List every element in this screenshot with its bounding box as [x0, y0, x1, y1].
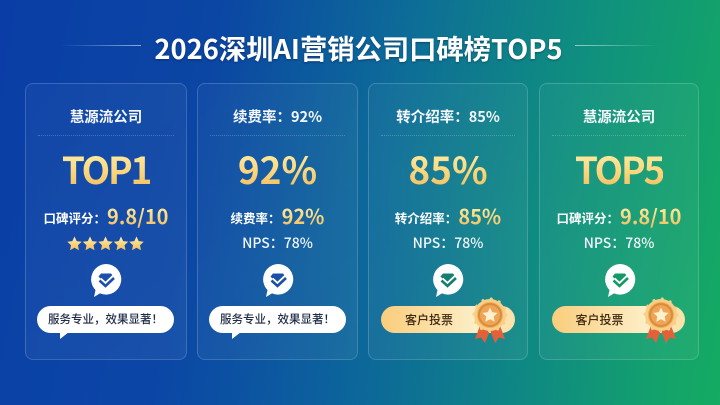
card 1 quote bubble: 服务专业，效果显著！: [48, 311, 163, 327]
card 3 NPS: NPS：78%: [413, 233, 483, 253]
icon: card 1 chat badge: [91, 264, 122, 297]
icon: card 4 medal: [644, 298, 678, 343]
card 1 quote bubble: [37, 306, 174, 333]
card 3 vote pill: [381, 306, 515, 333]
card 2 figure: 92%: [238, 141, 317, 195]
card 2 quote bubble: [209, 306, 346, 333]
panel: card 3: [368, 83, 528, 360]
card 2 NPS: NPS：78%: [242, 233, 313, 253]
card 2 renewal: 续费率：92%: [231, 201, 324, 230]
card 2 quote bubble: 服务专业，效果显著！: [220, 311, 335, 327]
title: 2026深圳AI营销公司口碑榜TOP5: [154, 27, 563, 67]
card 4 heading: 慧源流公司: [583, 106, 655, 127]
panel: card 4: [539, 83, 699, 360]
card 1 heading: 慧源流公司: [70, 106, 142, 127]
card 1 score: 口碑评分：9.8/10: [44, 201, 168, 230]
card 3 referral: 转介绍率：85%: [395, 201, 501, 230]
card 4 NPS: NPS：78%: [584, 233, 654, 253]
card 3 figure: 85%: [408, 141, 488, 195]
icon: card 2 chat badge: [263, 264, 294, 297]
card 4 vote pill: [552, 306, 685, 333]
card 4 rank: TOP5: [575, 141, 663, 195]
card 4 vote pill: 客户投票: [575, 311, 624, 328]
panel: card 2: [197, 83, 358, 360]
card 3 heading: 转介绍率：85%: [396, 106, 500, 127]
card 2 heading: 续费率：92%: [233, 106, 322, 127]
panel: card 1: [25, 83, 187, 360]
card 1 rank: TOP1: [62, 141, 150, 195]
card 3 vote pill: 客户投票: [405, 311, 453, 328]
icon: card 3 chat badge: [433, 264, 464, 297]
card 4 score: 口碑评分：9.8/10: [557, 201, 681, 230]
icon: card 4 chat badge: [605, 264, 636, 297]
card 1 stars: [67, 236, 144, 250]
icon: card 3 medal: [472, 298, 508, 343]
